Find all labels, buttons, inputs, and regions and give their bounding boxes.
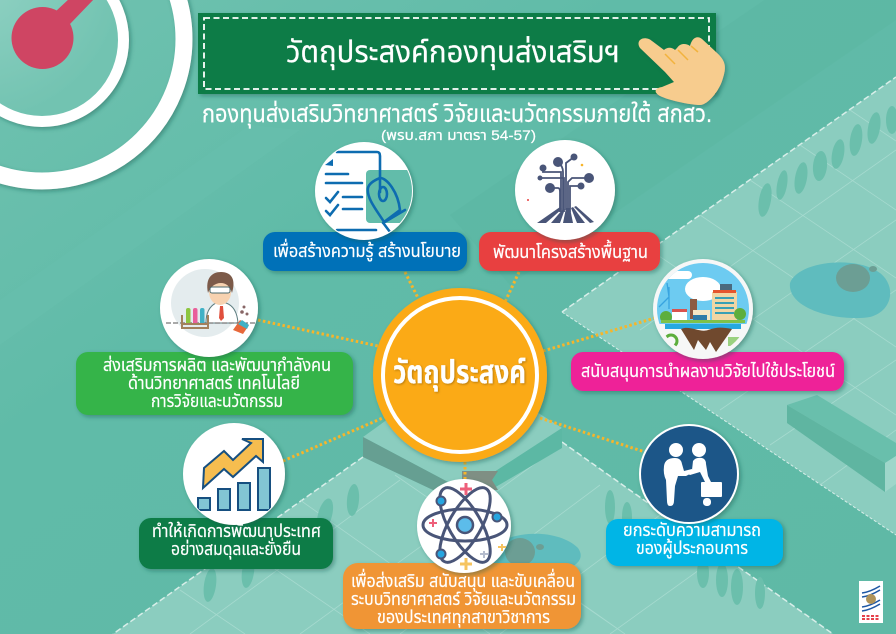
title text: วัตถุประสงค์กองทุนส่งเสริมฯ [286,36,620,70]
lower plate [113,442,833,634]
icon: scientist [160,259,258,357]
label [351,568,576,628]
label: ระบบวิทยาศาสตร์ วิจัยและนวัตกรรม [351,589,576,609]
panel: promote research system [343,479,581,629]
icon: circuit tree [515,140,615,240]
label [103,355,331,411]
label: เพื่อสร้างความรู้ สร้างนโยบาย [273,238,461,263]
label: ทำให้เกิดการพัฒนาประเทศ [152,521,321,541]
legal reference: (พรบ.สภา มาตรา 54-57) [381,127,536,143]
icon: agency logo [859,581,883,623]
label: เพื่อส่งเสริม สนับสนุน และขับเคลื่อน [351,568,575,592]
panel: research utilisation [571,259,844,391]
label [623,520,761,560]
label: ยกระดับความสามารถ [623,520,761,540]
icon: growth chart [183,423,285,525]
panel: entrepreneurs [606,424,783,566]
label: ด้านวิทยาศาสตร์ เทคโนโลยี [128,373,300,393]
panel: infrastructure [479,140,660,271]
label [152,521,321,560]
central label: วัตถุประสงค์ [393,354,526,391]
subtitle: กองทุนส่งเสริมวิทยาศาสตร์ วิจัยและนวัตกรรมภายใต้ สกสว. [202,100,712,129]
right raised bar [787,395,896,492]
grass shapes lower [202,484,765,609]
label: การวิจัยและนวัตกรรม [151,391,283,411]
upper right plate [562,77,896,535]
central circle [373,288,547,462]
central raised block [363,365,562,505]
icon: document and hand [315,142,413,240]
label: สนับสนุนการนำผลงานวิจัยไปใช้ประโยชน์ [581,361,835,382]
grass shapes upper [756,106,896,218]
subtitle [202,100,712,143]
concentric rings top left [0,0,184,181]
icon: handshake [639,424,739,524]
label: อย่างสมดุลและยั่งยืน [171,537,301,560]
title banner [198,13,716,94]
icon: green city [653,259,753,359]
icon: red pin [12,0,95,69]
icon: pointing hand [638,37,725,105]
panel: knowledge and policy [263,142,467,271]
dotted connectors [258,272,655,482]
panel: sustainable development [139,423,333,569]
label: พัฒนาโครงสร้างพื้นฐาน [493,239,648,262]
lake upper right [790,262,890,318]
label: ส่งเสริมการผลิต และพัฒนากำลังคน [103,355,331,375]
panel: workforce [76,259,353,415]
icon: atom [417,479,511,573]
lake lower [489,534,581,575]
small flag [462,471,498,490]
label: ของประเทศทุกสาขาวิชาการ [377,607,550,628]
label: ของผู้ประกอบการ [636,538,748,560]
